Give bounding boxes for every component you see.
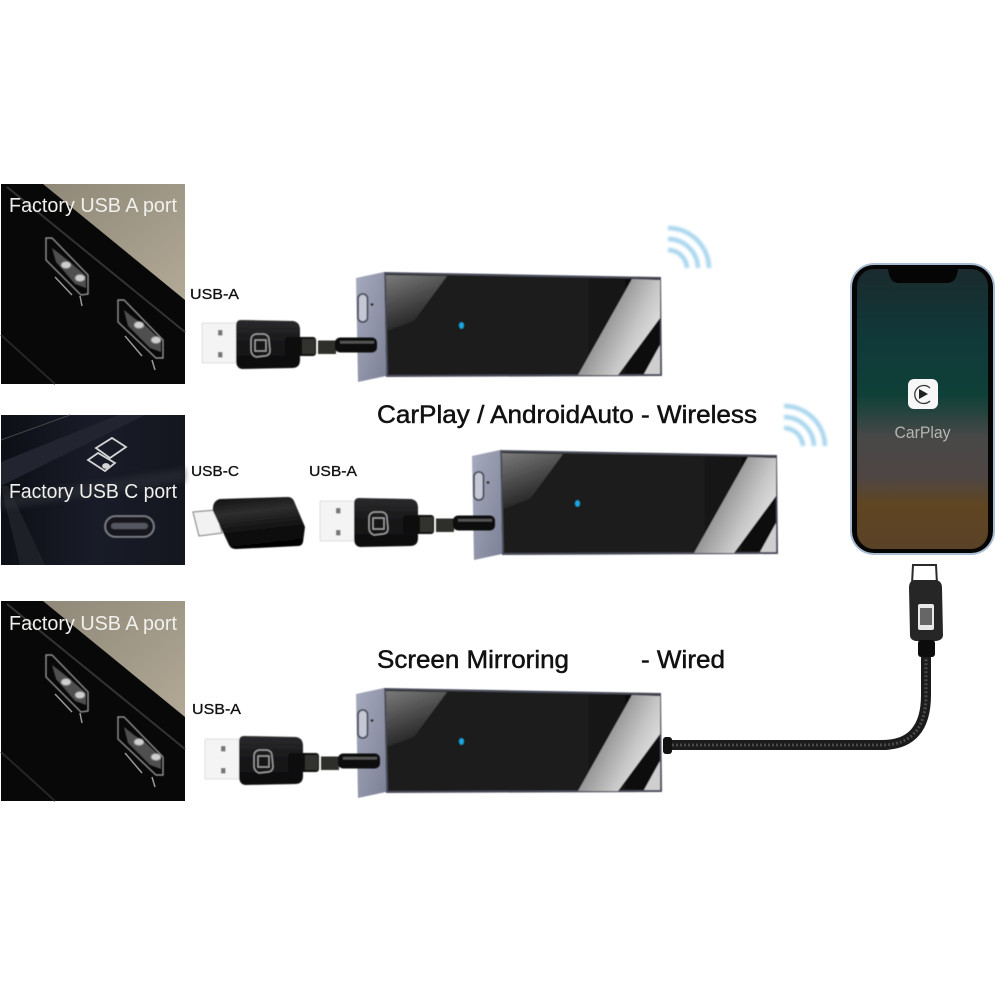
heading: CarPlay / AndroidAuto - Wireless: CarPlay / AndroidAuto - Wireless: [377, 401, 757, 429]
label: USB-A bottom: USB-A: [192, 701, 241, 718]
USB-C to USB-A adapter: [193, 497, 305, 549]
port: USB-C slot: [105, 516, 154, 537]
icon: devices symbol: [88, 438, 126, 471]
panel: factory USB A port photo (bottom): [1, 601, 185, 801]
CarPlay label: CarPlay: [894, 423, 951, 442]
USB-A cable plug top: [202, 320, 377, 369]
USB-A cable plug bottom: [205, 736, 380, 785]
label: USB-A top: USB-A: [190, 286, 239, 303]
label: USB-C: USB-C: [191, 463, 239, 480]
wireless adapter device top: [356, 272, 662, 382]
heading: Screen Mirroring: Screen Mirroring: [377, 646, 569, 674]
label: Factory USB A port: Factory USB A port: [9, 613, 177, 635]
notch: [888, 268, 958, 283]
USB-C connector to phone: [909, 565, 943, 657]
panel: factory USB C port photo: [1, 415, 185, 565]
wireless adapter device middle: [472, 450, 778, 560]
wired adapter device bottom: [356, 688, 662, 798]
heading: - Wired: - Wired: [641, 646, 725, 674]
icon: wifi signal middle: [784, 406, 825, 446]
panel: factory USB A port photo (top): [1, 184, 185, 384]
braided cable from bottom device to phone connector: [663, 655, 926, 754]
icon: wifi signal top: [668, 228, 709, 268]
USB-A cable plug middle: [320, 498, 495, 547]
label: USB-A middle: USB-A: [309, 463, 357, 480]
smartphone showing CarPlay: [850, 263, 995, 555]
label: Factory USB A port: Factory USB A port: [9, 195, 177, 217]
icon: CarPlay app: [908, 379, 938, 409]
label: Factory USB C port: Factory USB C port: [9, 481, 177, 503]
icon: phone on connector: [918, 604, 934, 630]
